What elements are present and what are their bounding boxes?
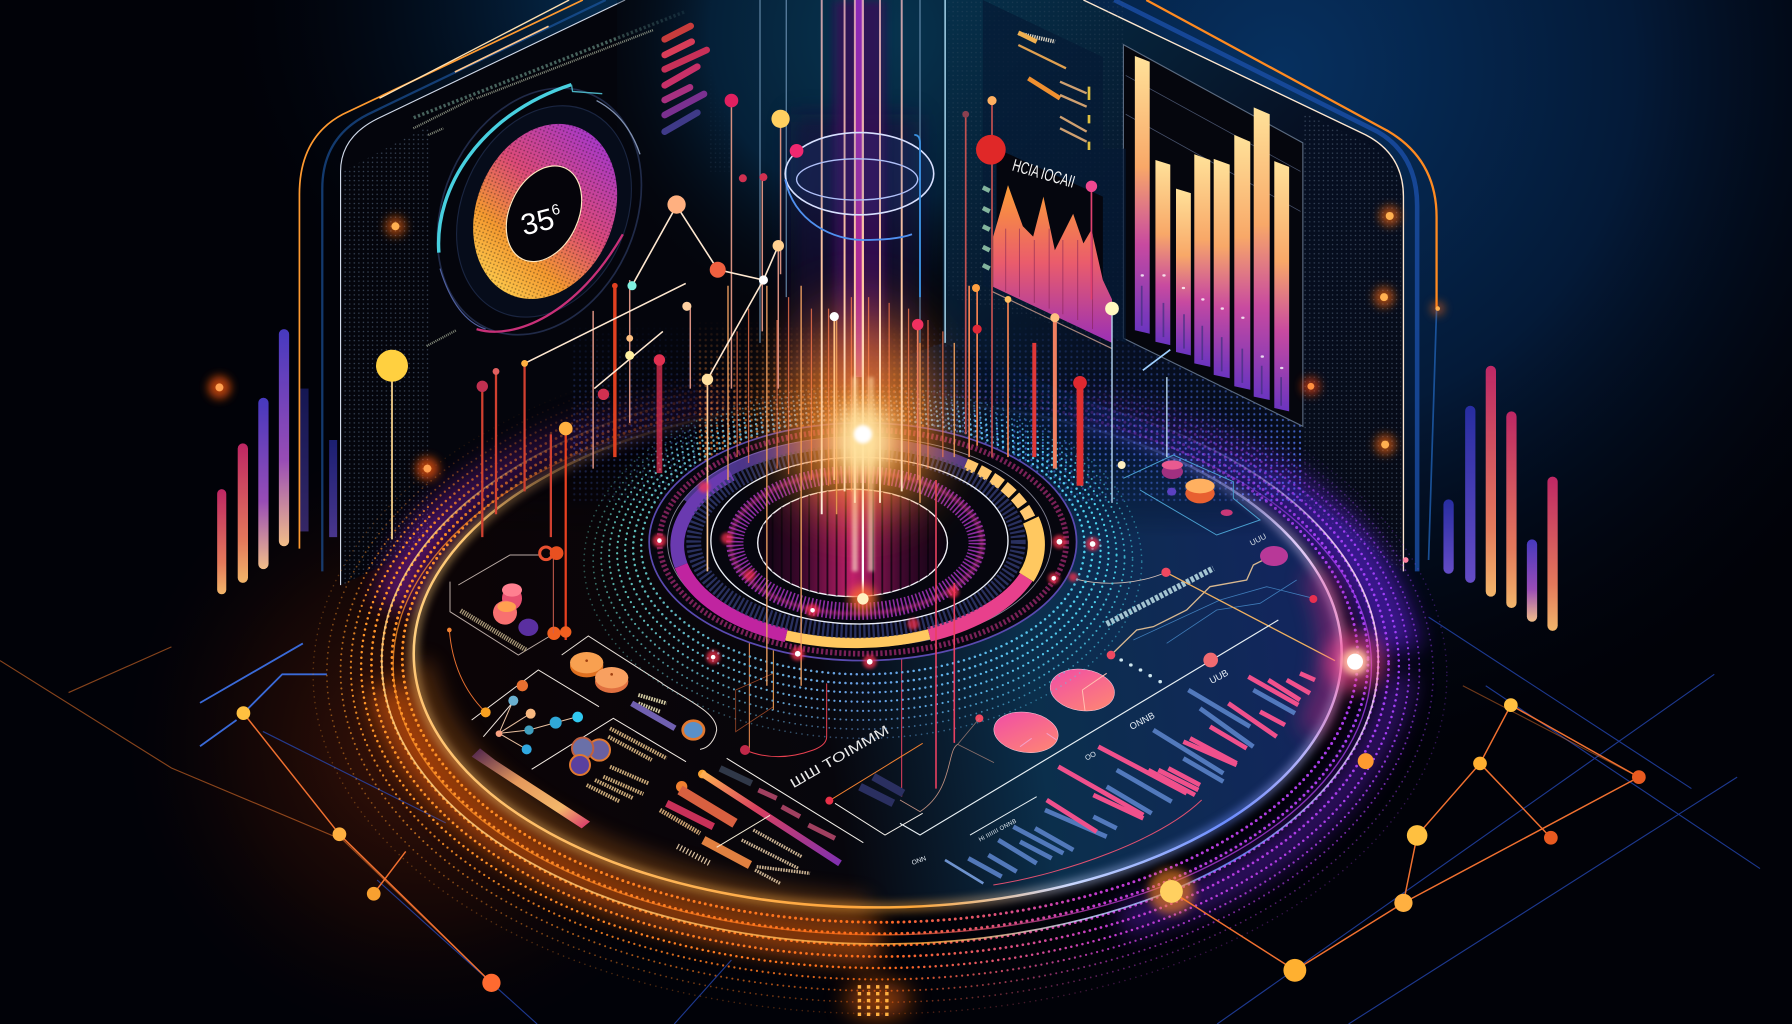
chart labels: ONNB (1128, 710, 1156, 732)
bar chart: blue bars (945, 690, 1295, 883)
platform disc (414, 400, 1342, 907)
chart labels (911, 668, 1230, 867)
mini list (1018, 33, 1089, 150)
network graph panel (472, 670, 599, 754)
chart labels: UUB (1208, 668, 1230, 686)
stem lines (392, 101, 1167, 640)
panel: right back screen (943, 0, 1437, 571)
central bright points (653, 481, 1099, 669)
chart labels: ONN (911, 855, 927, 867)
gauge value: 6 (550, 202, 562, 219)
disc panels: right side (900, 455, 1385, 885)
beam core glare (794, 371, 931, 509)
gauge: 356 donut (400, 55, 679, 367)
divider with node (900, 620, 1278, 835)
floor grid: right (1217, 617, 1760, 1024)
central pit (758, 480, 947, 600)
legend swatches (983, 187, 990, 269)
gauge hole (492, 154, 596, 274)
floor grid: left (0, 643, 731, 1024)
side bars: right (1443, 366, 1558, 631)
floor nodes: right (1149, 557, 1646, 982)
venn panel (532, 718, 686, 802)
bottom glow dots (846, 982, 910, 1019)
nodes (376, 94, 1119, 638)
stems with nodes (376, 94, 1167, 640)
side bars: left (217, 329, 337, 594)
gauge outer ring (400, 55, 679, 367)
small chart panel (825, 743, 923, 835)
panel: area chart (983, 0, 1126, 349)
dotted halo around the platform (313, 337, 1447, 1014)
small label: IIIIIIIIIII (674, 841, 713, 868)
pie charts (991, 665, 1117, 757)
slanted legend bars (665, 26, 707, 132)
orange pointer to flare (1166, 572, 1335, 661)
floor nodes: left (237, 706, 501, 992)
panel glow dots (208, 206, 1445, 480)
central halo: teal dots (584, 386, 1142, 738)
angled heading: ШШ TOIMMM (787, 722, 892, 791)
line chart links (525, 206, 778, 389)
vertical light beam (728, 0, 954, 789)
chart heading: HCIA IOCAII (1010, 155, 1077, 192)
bottom curve (993, 800, 1202, 885)
chart labels: Hi IIIIIII ONNB (978, 819, 1018, 843)
platform rim (382, 377, 1378, 944)
long gradient bar (472, 748, 590, 828)
rain of dots below the screens (573, 328, 1302, 502)
cylinder panel (1118, 455, 1260, 535)
central ring dial (649, 423, 1077, 661)
cube cluster panel (447, 547, 561, 712)
orange discs panel (562, 636, 717, 749)
panel: left back screen (299, 0, 943, 585)
line chart: UUU (1248, 532, 1268, 548)
horizontal bars panel (660, 758, 863, 883)
flare (1325, 632, 1385, 692)
chart labels: OO (1083, 749, 1098, 762)
disc panels: left side (447, 547, 923, 883)
gauge donut (448, 102, 643, 321)
pointer node (1161, 568, 1171, 577)
gauge value: 35 (518, 202, 558, 242)
framed stem (736, 573, 902, 797)
bar chart: pink bars (1047, 673, 1315, 832)
line chart (1077, 532, 1317, 682)
glow haze around platform (389, 394, 1400, 943)
glass cylinder (785, 133, 934, 297)
small text strips on left screen (413, 30, 653, 346)
panel: right bar chart (1123, 45, 1303, 426)
bars (1135, 56, 1150, 334)
